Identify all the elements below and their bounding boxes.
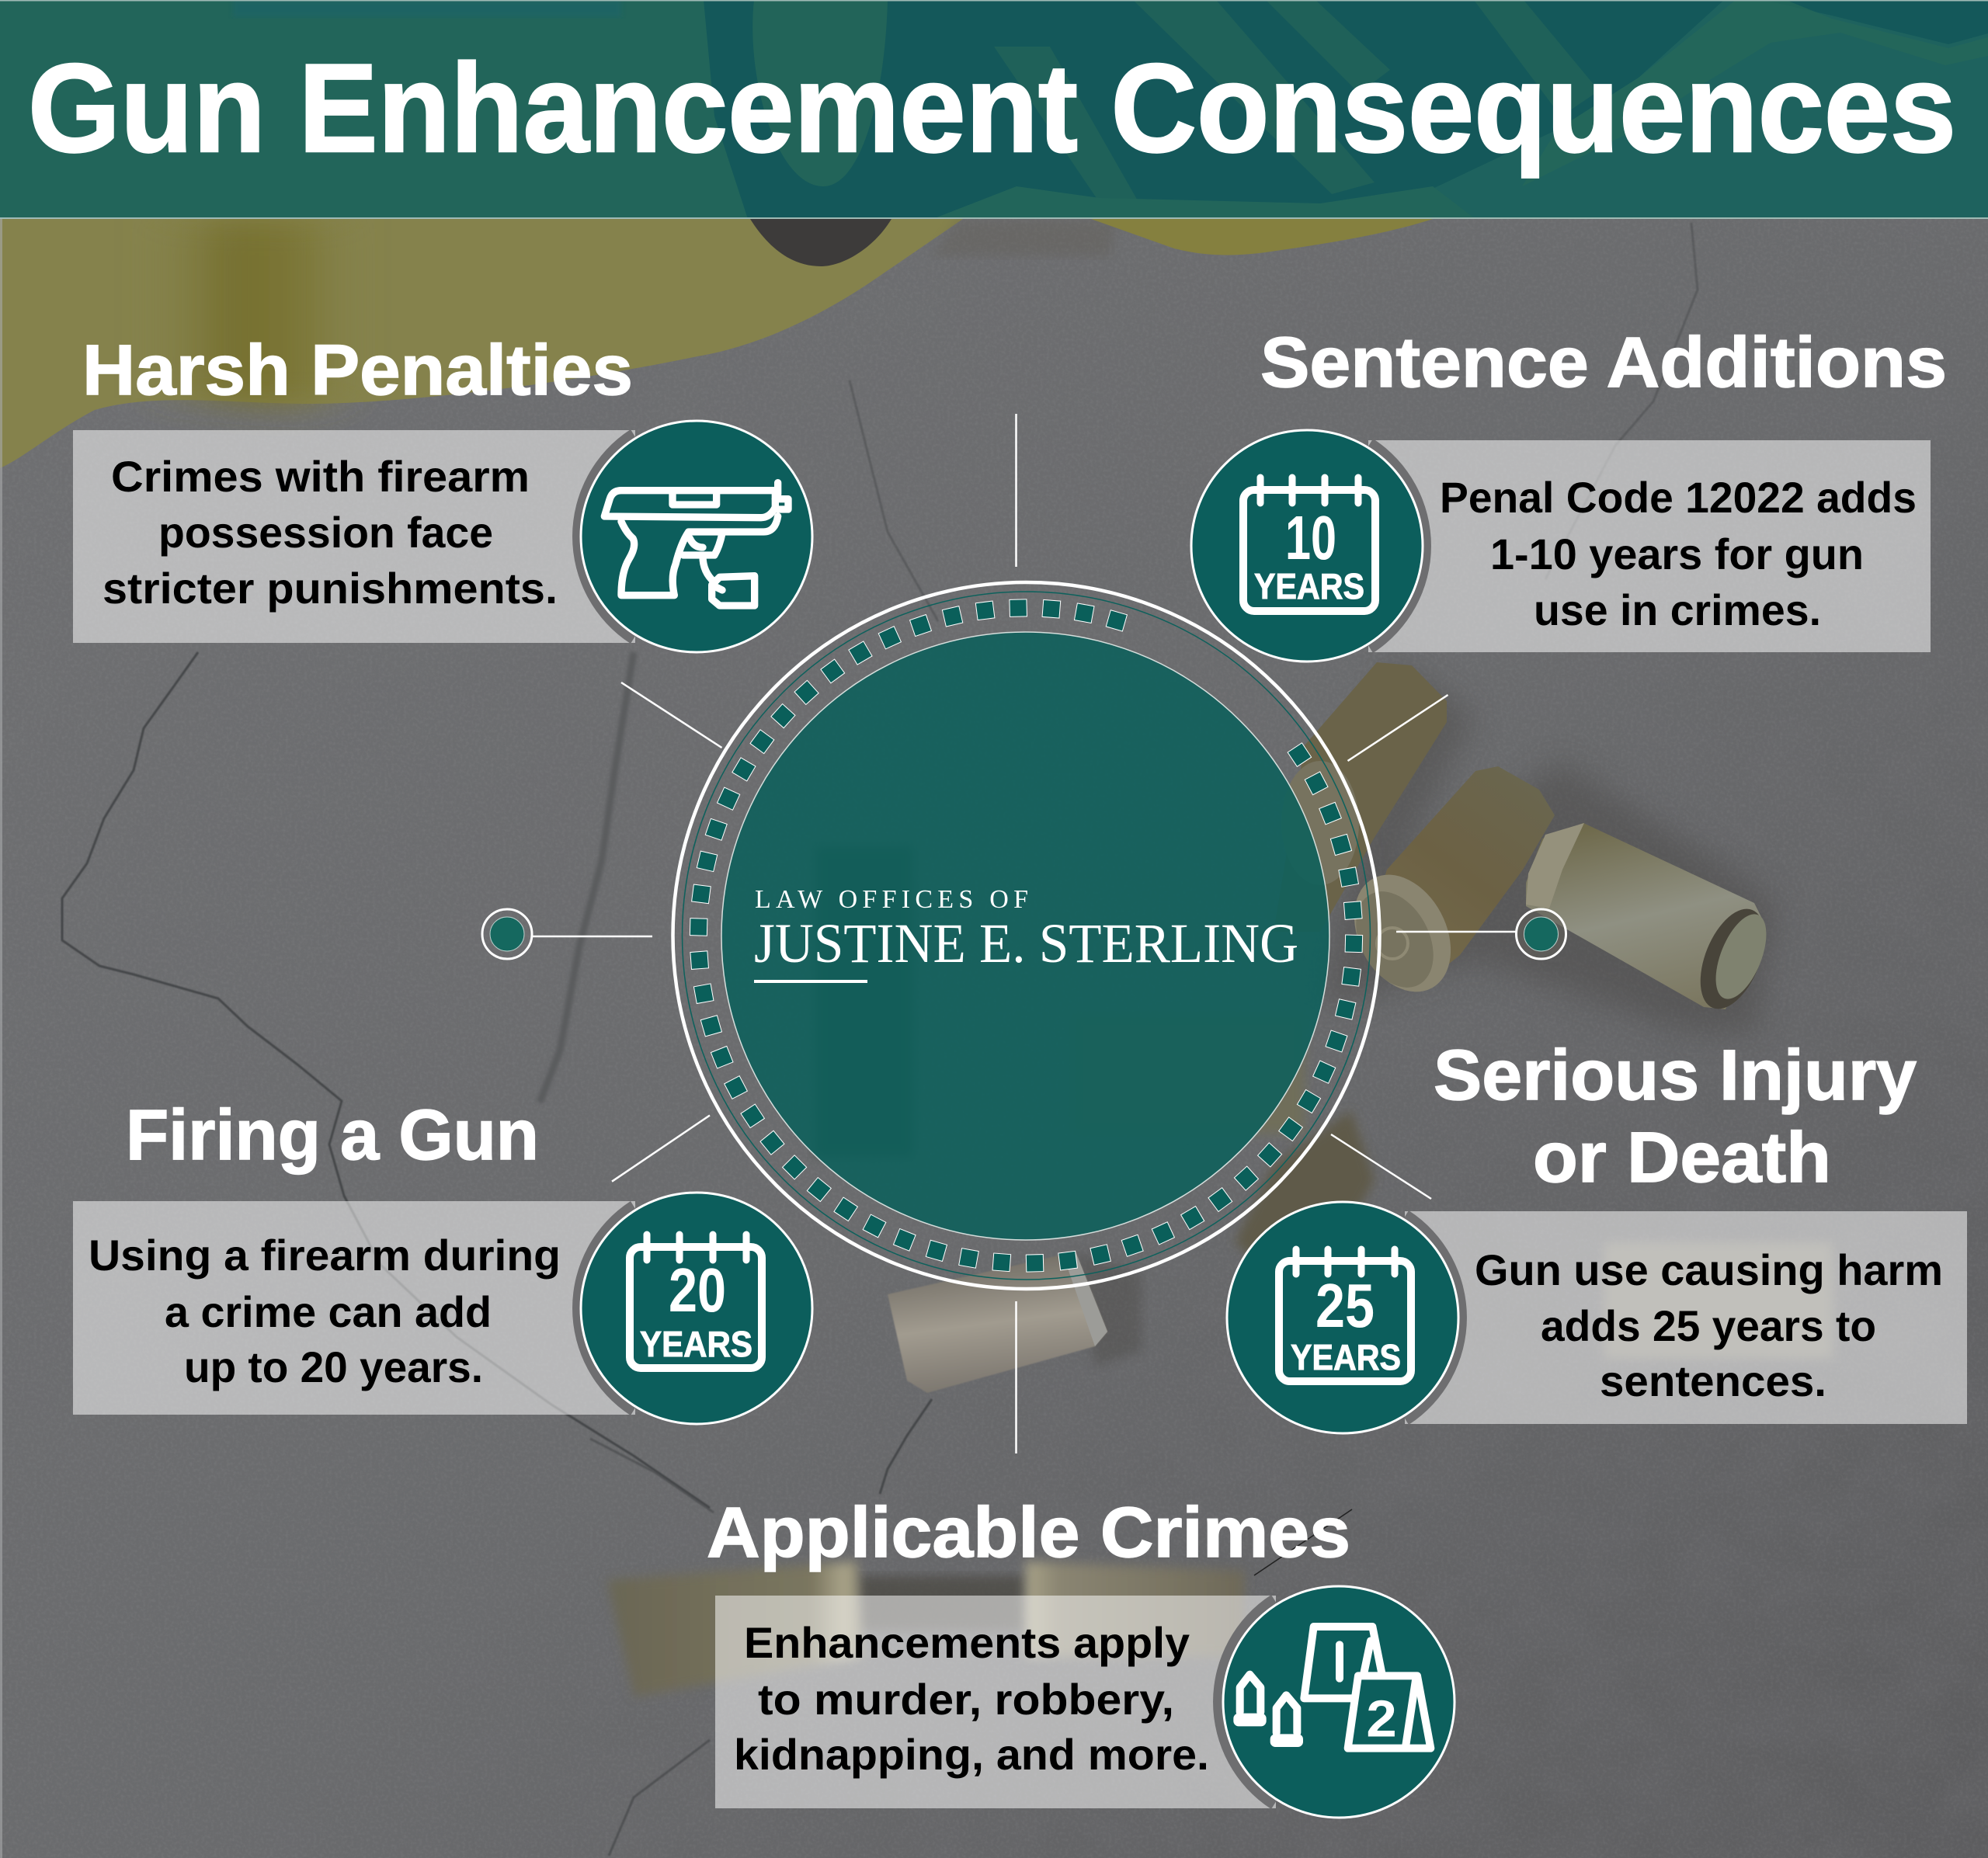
teal disc	[721, 632, 1329, 1240]
text box	[73, 430, 635, 643]
heading: Serious Injury	[1434, 1036, 1917, 1115]
heading: Applicable Crimes	[707, 1493, 1350, 1572]
heading: Sentence Additions	[1260, 323, 1947, 402]
text box: stricter punishments.	[103, 564, 558, 613]
icon: calendar 20 years	[572, 1193, 812, 1424]
firm logo: JUSTINE E. STERLING	[754, 912, 1298, 974]
text box: Crimes with firearm	[111, 452, 530, 501]
heading: Firing a Gun	[126, 1096, 539, 1175]
text box	[1368, 440, 1931, 652]
connector spokes and dots	[482, 414, 1566, 1453]
text box: Gun use causing harm	[1475, 1245, 1943, 1294]
header banner	[0, 0, 1988, 219]
icon: evidence markers and bullets	[1213, 1586, 1455, 1818]
panel: applicable crimes	[707, 1493, 1455, 1818]
icon: calendar 20 years: 20	[669, 1255, 726, 1325]
text box: a crime can add	[165, 1287, 492, 1336]
firm logo: LAW OFFICES OF	[755, 885, 1028, 914]
text box: adds 25 years to	[1541, 1301, 1876, 1350]
icon: calendar 25 years: 25	[1315, 1271, 1375, 1340]
panel: firing a gun	[73, 1096, 812, 1424]
icon: calendar 10 years	[1191, 430, 1431, 662]
heading	[1434, 1036, 1917, 1197]
text box: sentences.	[1600, 1356, 1826, 1405]
icon: calendar 25 years: YEARS	[1291, 1337, 1401, 1377]
central emblem	[673, 582, 1379, 1289]
text box: kidnapping, and more.	[734, 1730, 1209, 1779]
text box: Penal Code 12022 adds	[1440, 473, 1917, 522]
panel: harsh penalties	[73, 331, 812, 652]
ring of squares	[690, 599, 1363, 1272]
text box: Using a firearm during	[89, 1231, 561, 1280]
tape lettering seen through banner	[704, 0, 1724, 219]
icon: evidence markers and bullets: 2	[1366, 1691, 1397, 1749]
heading: or Death	[1533, 1118, 1831, 1197]
heading: Harsh Penalties	[82, 331, 633, 410]
text box	[73, 1201, 635, 1415]
panel: sentence additions	[1191, 323, 1947, 662]
firm logo	[754, 885, 1298, 983]
text box	[715, 1596, 1276, 1808]
text box: possession face	[158, 508, 493, 557]
icon: handgun with evidence tag	[572, 421, 812, 652]
icon: calendar 25 years	[1227, 1202, 1467, 1433]
casing shadows	[1320, 660, 1778, 1033]
text box: Enhancements apply	[744, 1618, 1190, 1667]
left dot	[482, 909, 532, 959]
text box	[1405, 1211, 1967, 1424]
text box: up to 20 years.	[184, 1342, 483, 1391]
text box: use in crimes.	[1534, 585, 1821, 634]
right dot	[1516, 909, 1566, 959]
panel: serious injury or death	[1227, 1036, 1967, 1433]
text box: 1-10 years for gun	[1490, 530, 1864, 578]
icon: calendar 20 years: YEARS	[640, 1324, 752, 1364]
icon: calendar 10 years: YEARS	[1254, 566, 1364, 606]
text box: to murder, robbery,	[758, 1675, 1174, 1724]
icon: calendar 10 years: 10	[1285, 503, 1336, 572]
